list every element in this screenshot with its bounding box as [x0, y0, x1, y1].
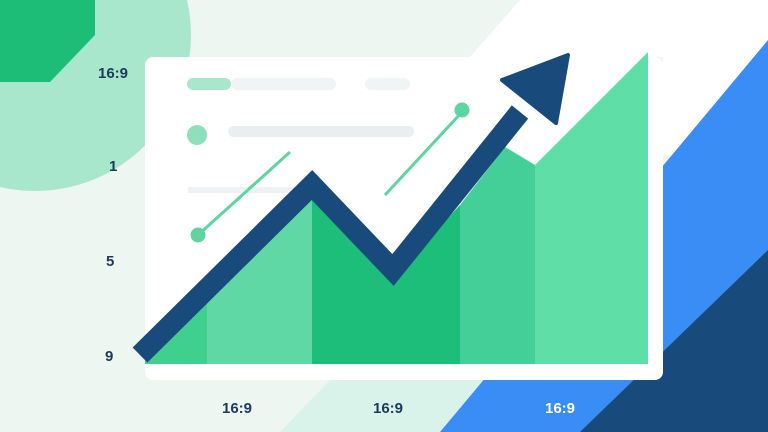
growth arrow — [140, 55, 568, 355]
blue diagonal band — [440, 40, 768, 432]
axis labels left: 16:9 — [98, 65, 128, 82]
navy band — [580, 250, 768, 432]
background circle — [0, 0, 191, 191]
axis labels left — [98, 65, 128, 365]
axis labels bottom — [222, 400, 575, 417]
pale mint bottom band — [280, 380, 500, 432]
axis labels bottom: 16:9 — [222, 400, 252, 417]
dark green corner shape — [0, 0, 95, 82]
white area top right — [470, 0, 768, 155]
axis labels left: 1 — [109, 158, 117, 175]
placeholder bars — [187, 78, 414, 193]
axis labels bottom: 16:9 — [373, 400, 403, 417]
axis labels bottom: 16:9 — [545, 400, 575, 417]
axis labels left: 9 — [105, 348, 113, 365]
panel — [140, 52, 663, 380]
light green guide lines — [192, 104, 468, 241]
axis labels left: 5 — [106, 253, 114, 270]
green area chart — [145, 52, 648, 364]
